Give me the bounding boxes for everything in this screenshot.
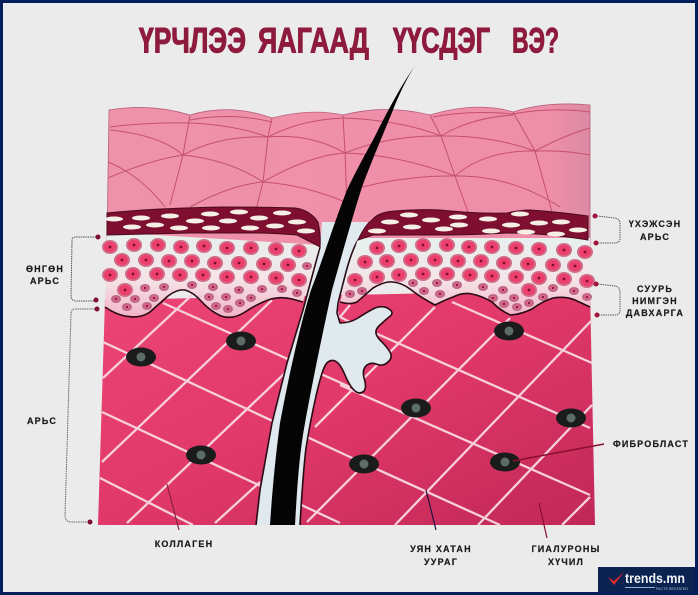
label: elastic protein (410, 544, 472, 567)
logo: trends.mn: FACTS RESTATED (656, 586, 688, 591)
panel: skin cross-section (98, 63, 595, 525)
label: lower right (626, 284, 684, 318)
logo: trends.mn (598, 567, 695, 592)
epidermis cell layer, right (340, 238, 595, 315)
fibroblast cells (126, 322, 586, 474)
stratum corneum, right (358, 210, 588, 240)
label: lower left: АРЬС (27, 416, 57, 426)
bracket: lower right (594, 282, 620, 318)
bracket: lower left (65, 306, 100, 524)
label: hyaluronic acid (531, 544, 601, 567)
label: elastic protein: УЯН ХАТАН (410, 544, 472, 554)
title: ЯАГААД (258, 22, 369, 60)
label: upper left: АРЬС (30, 276, 60, 286)
label: fibroblast: ФИБРОБЛАСТ (613, 439, 689, 449)
label: upper right (629, 219, 681, 242)
label: upper right: АРЬС (640, 232, 670, 242)
arrow: fibroblast (513, 444, 604, 461)
label: lower right: НИМГЭН (632, 296, 678, 306)
hair sheath and gland (256, 222, 392, 525)
logo: trends.mn: trends.mn (625, 570, 685, 586)
label: lower right: СУУРЬ (637, 284, 673, 294)
bracket: upper right (592, 214, 620, 246)
label: upper left: ӨНГӨН (26, 264, 64, 274)
title: ВЭ? (512, 22, 559, 60)
collagen fibres (100, 295, 592, 525)
title: ҮҮСДЭГ (393, 22, 490, 60)
label: lower right: ДАВХАРГА (626, 308, 684, 318)
title (139, 22, 559, 60)
label: upper right: ҮХЭЖСЭН (629, 219, 681, 229)
skin surface layer (107, 104, 590, 245)
arrow: elastic protein (426, 490, 436, 530)
arrow: collagen (167, 484, 179, 530)
bracket: upper left (71, 234, 100, 302)
epidermis cell layer, left (102, 232, 320, 317)
dermis (98, 290, 595, 525)
title: ҮРЧЛЭЭ (139, 22, 246, 60)
arrow: hyaluronic acid (539, 503, 547, 538)
label: elastic protein: УУРАГ (424, 557, 458, 567)
label: hyaluronic acid: ХҮЧИЛ (548, 557, 584, 567)
hair (270, 63, 417, 525)
stratum corneum, left (105, 207, 320, 247)
label: upper left (26, 264, 64, 286)
sheath outline (256, 240, 392, 525)
label: collagen: КОЛЛАГЕН (155, 539, 213, 549)
basal membrane wavy line (105, 282, 590, 317)
label: hyaluronic acid: ГИАЛУРОНЫ (531, 544, 601, 554)
